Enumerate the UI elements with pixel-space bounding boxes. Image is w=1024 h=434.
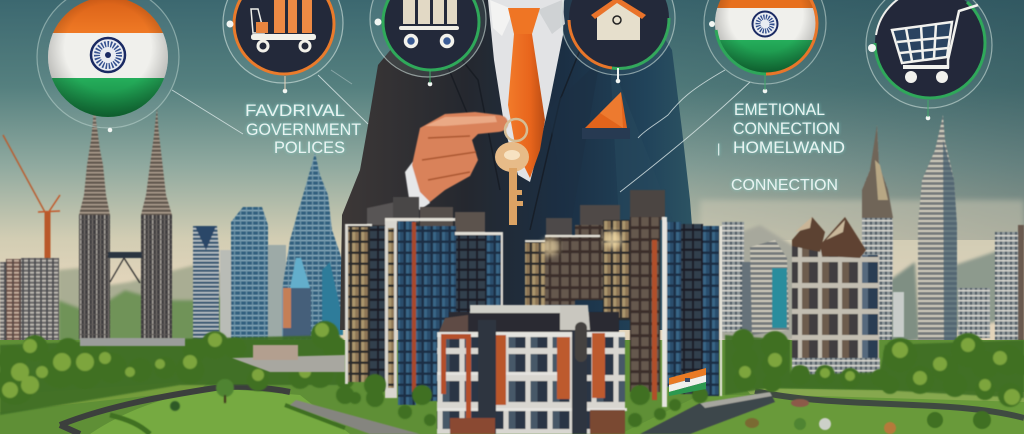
icon: flag globe left	[37, 0, 179, 128]
right peaked building	[792, 217, 880, 375]
twin towers	[79, 95, 172, 339]
key	[495, 119, 529, 225]
low pavilion	[80, 338, 345, 372]
left brown buildings	[0, 258, 59, 349]
small Indian flag banner	[669, 368, 706, 396]
pocket and pocket square	[582, 92, 630, 139]
connector dots	[108, 18, 930, 132]
text: emotional connection homeland: CONNECTION	[733, 120, 840, 138]
mid towers	[193, 207, 286, 342]
front apartment building	[437, 305, 627, 434]
left trees	[0, 321, 354, 415]
central courtyard trees	[336, 374, 708, 427]
icon: house	[561, 0, 675, 75]
text: emotional connection homeland: |	[717, 141, 720, 156]
lawn details	[110, 392, 991, 434]
text: favorable government policies: GOVERNMENT	[246, 121, 361, 139]
crane	[3, 135, 60, 259]
blue skyscraper	[282, 153, 343, 345]
text: favorable government policies: FAVDRIVAL	[245, 102, 345, 120]
right trees	[725, 329, 1024, 407]
hand holding key	[405, 112, 508, 210]
text: emotional connection homeland: EMETIONAL	[734, 101, 825, 119]
shirt and collar	[488, 0, 565, 182]
central right apartment tower	[525, 190, 722, 407]
text: favorable government policies: POLICES	[274, 139, 345, 157]
right skyscrapers	[722, 115, 1024, 355]
callout lines	[172, 70, 750, 192]
icon: flag globe right	[704, 0, 827, 84]
text: connection: CONNECTION	[731, 177, 838, 194]
text: emotional connection homeland	[717, 101, 845, 157]
suit jacket	[340, 0, 700, 330]
icon: government policy cart	[223, 0, 343, 83]
icon: shopping cart	[866, 0, 992, 108]
text: emotional connection homeland: HOMELWAND	[733, 139, 845, 157]
ground and lawn	[0, 340, 1024, 434]
orange tie	[508, 8, 545, 178]
text: favorable government policies	[245, 102, 361, 157]
distant hills	[58, 225, 1005, 345]
icon: trolley of goods	[370, 0, 486, 77]
central left apartment tower	[345, 197, 503, 405]
